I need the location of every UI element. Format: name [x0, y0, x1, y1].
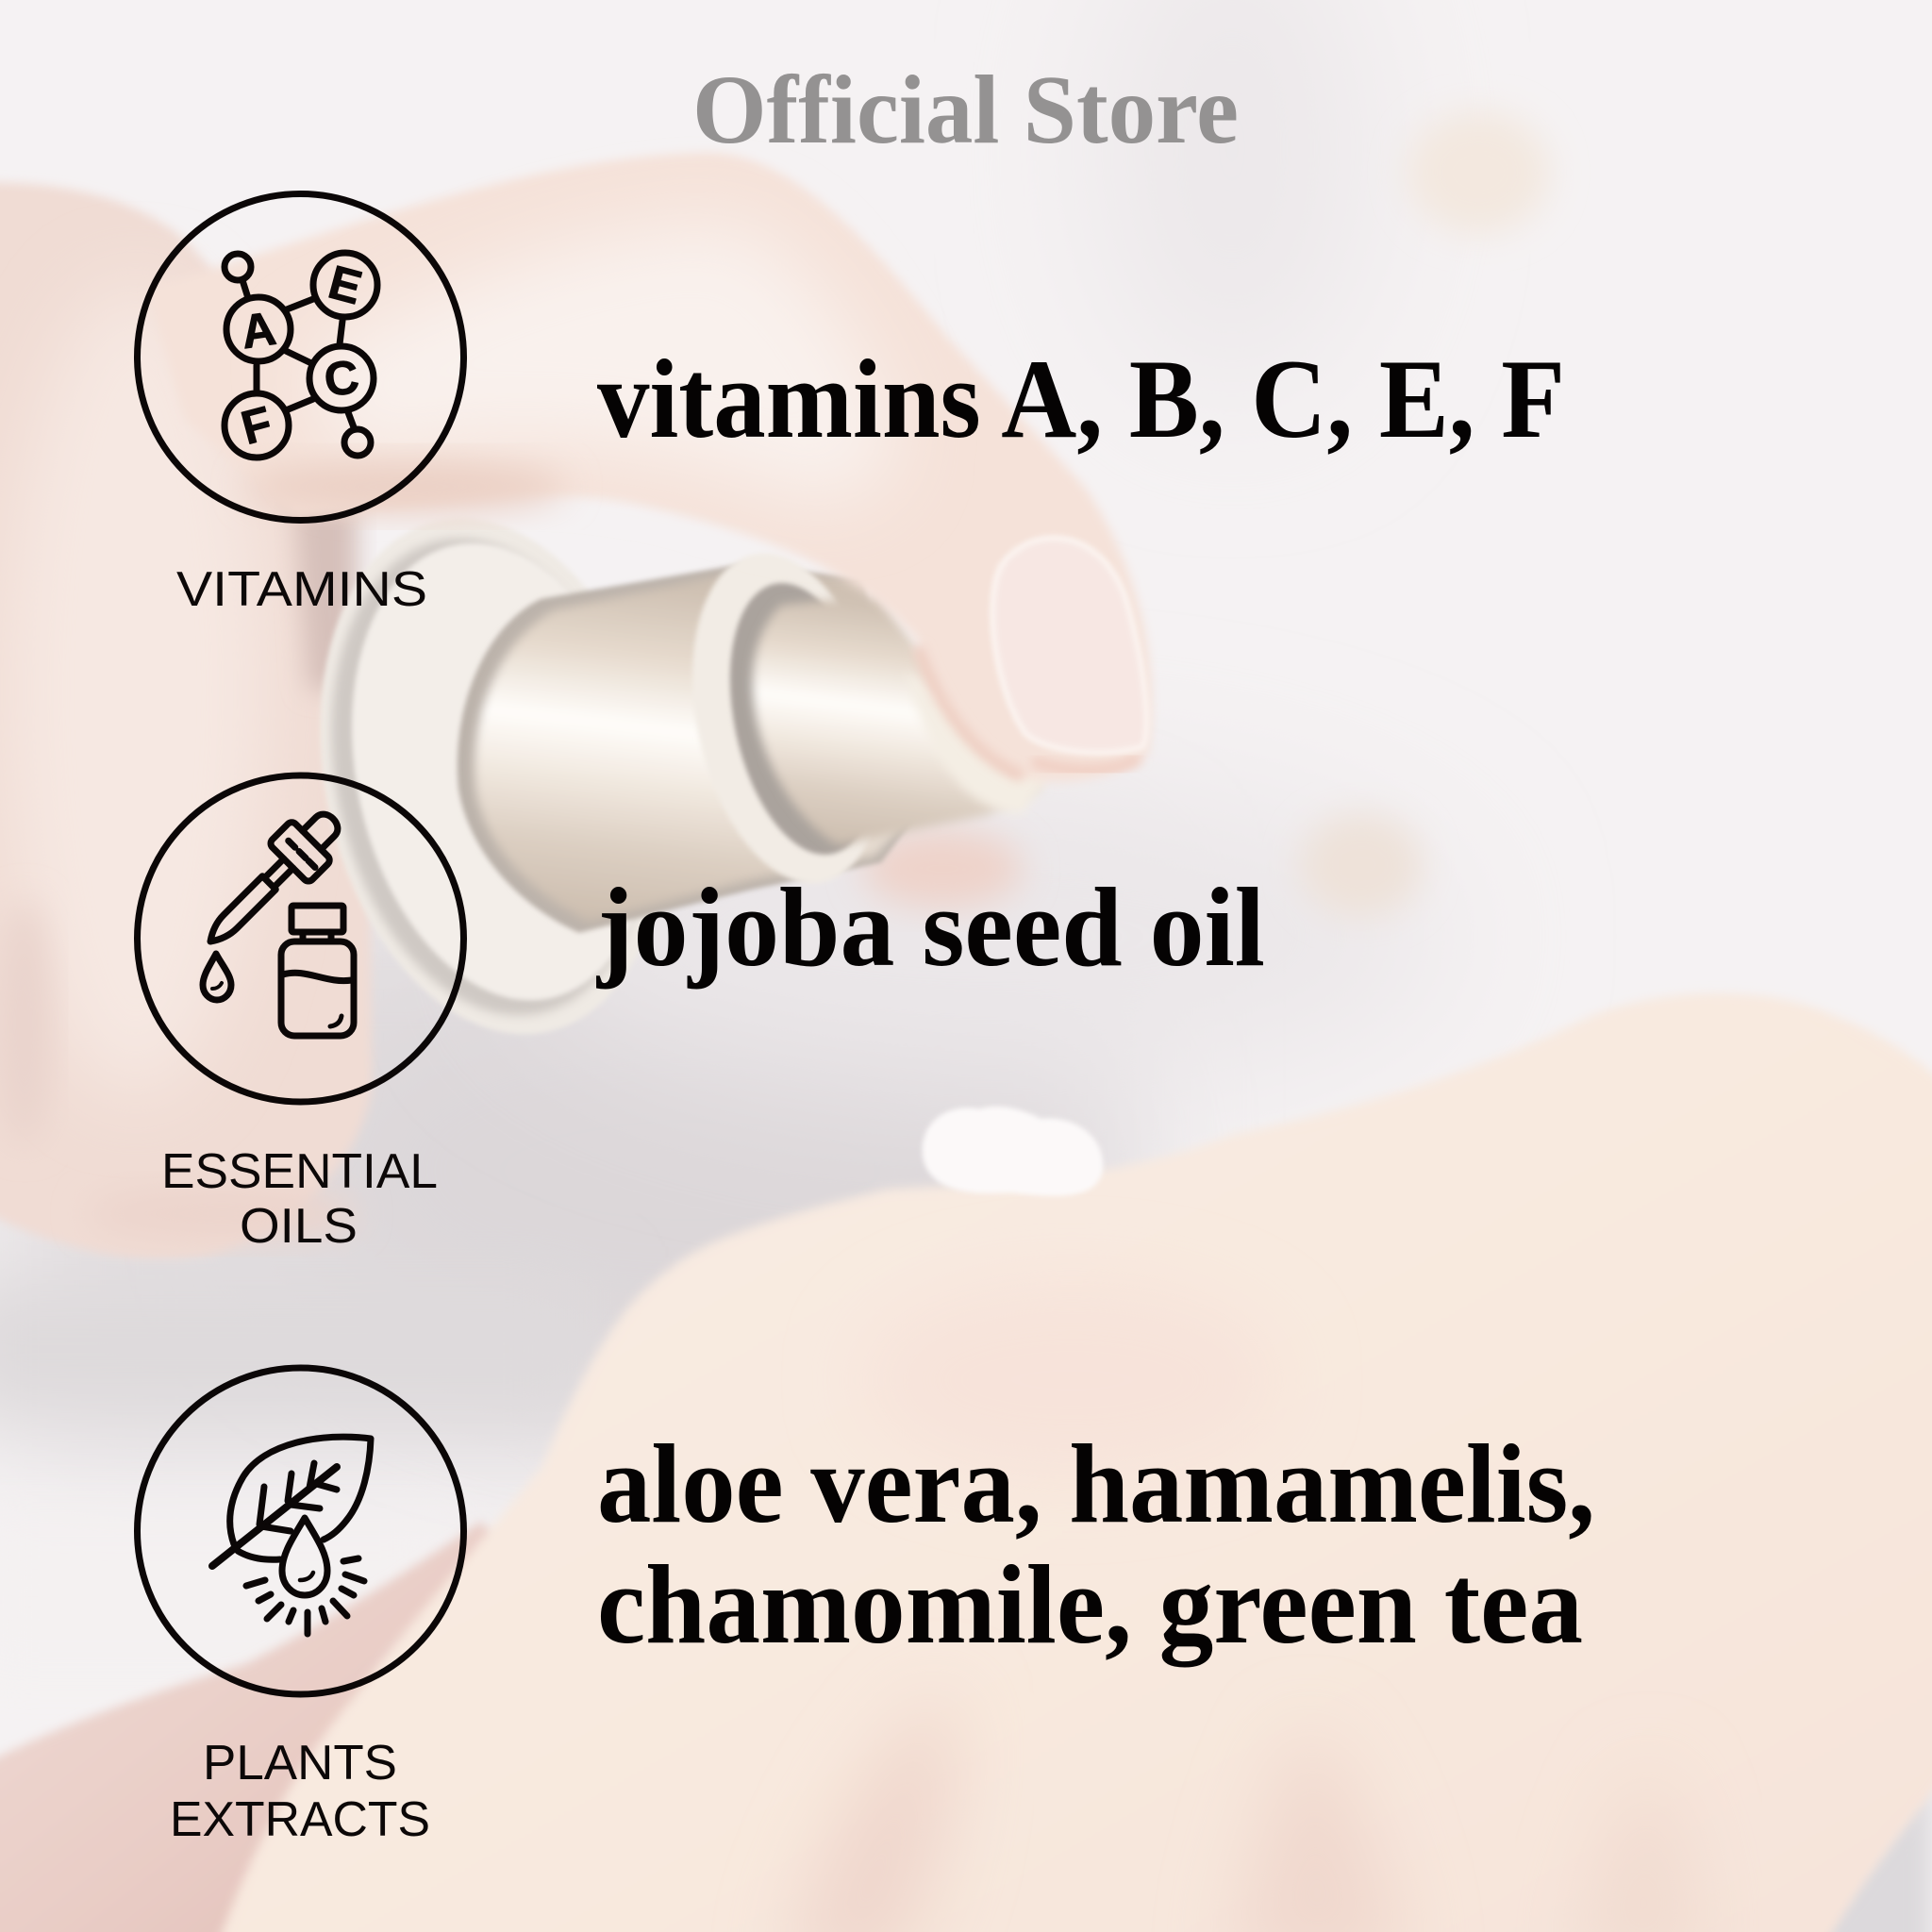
panel: plants extracts	[138, 1368, 1595, 1847]
panel: essential oils	[138, 775, 1265, 1254]
text: vitamins list: vitamins A, B, C, E, F	[597, 336, 1565, 461]
label: essential oils: ESSENTIAL	[161, 1144, 438, 1199]
blurred spots	[1407, 111, 1550, 234]
label: essential oils: OILS	[240, 1199, 358, 1254]
text: plant extracts list: chamomile, green tea	[597, 1541, 1583, 1668]
label: vitamins: VITAMINS	[176, 562, 427, 617]
pump: wide cylinder	[458, 564, 918, 933]
pump: plate	[275, 486, 711, 1067]
icon: vitamins molecule: F	[236, 396, 277, 455]
pink finger behind pump	[862, 829, 1023, 908]
title: Official Store	[692, 56, 1239, 164]
shadow under finger pad	[918, 647, 1023, 776]
lower hand: finger behind	[0, 1522, 567, 1932]
icon: vitamins molecule: A	[238, 302, 279, 358]
pump: narrow cylinder	[753, 595, 1045, 845]
text: plant extracts list	[597, 1421, 1595, 1668]
icon: vitamins molecule: E	[324, 256, 367, 314]
pump: collar ring	[664, 536, 912, 901]
label: plants extracts: PLANTS	[203, 1736, 397, 1790]
holding hand: thumb	[0, 182, 372, 1258]
label: plants extracts	[170, 1736, 430, 1847]
icon: dropper and bottle	[138, 775, 464, 1102]
panel: vitamins	[138, 194, 1565, 617]
text: jojoba: jojoba seed oil	[596, 864, 1265, 990]
text: plant extracts list: aloe vera, hamamelis,	[597, 1421, 1595, 1546]
label: plants extracts: EXTRACTS	[170, 1792, 430, 1847]
cream drop	[923, 1107, 1103, 1196]
icon: leaf with drop	[138, 1368, 464, 1694]
nail	[992, 538, 1147, 753]
label: essential oils	[161, 1144, 438, 1254]
lower hand: knuckle shadows	[789, 1688, 952, 1932]
index finger	[148, 153, 1152, 781]
icon: vitamins molecule	[138, 194, 464, 521]
icon: vitamins molecule: C	[321, 350, 362, 407]
lower hand: back of hand	[209, 993, 1932, 1932]
